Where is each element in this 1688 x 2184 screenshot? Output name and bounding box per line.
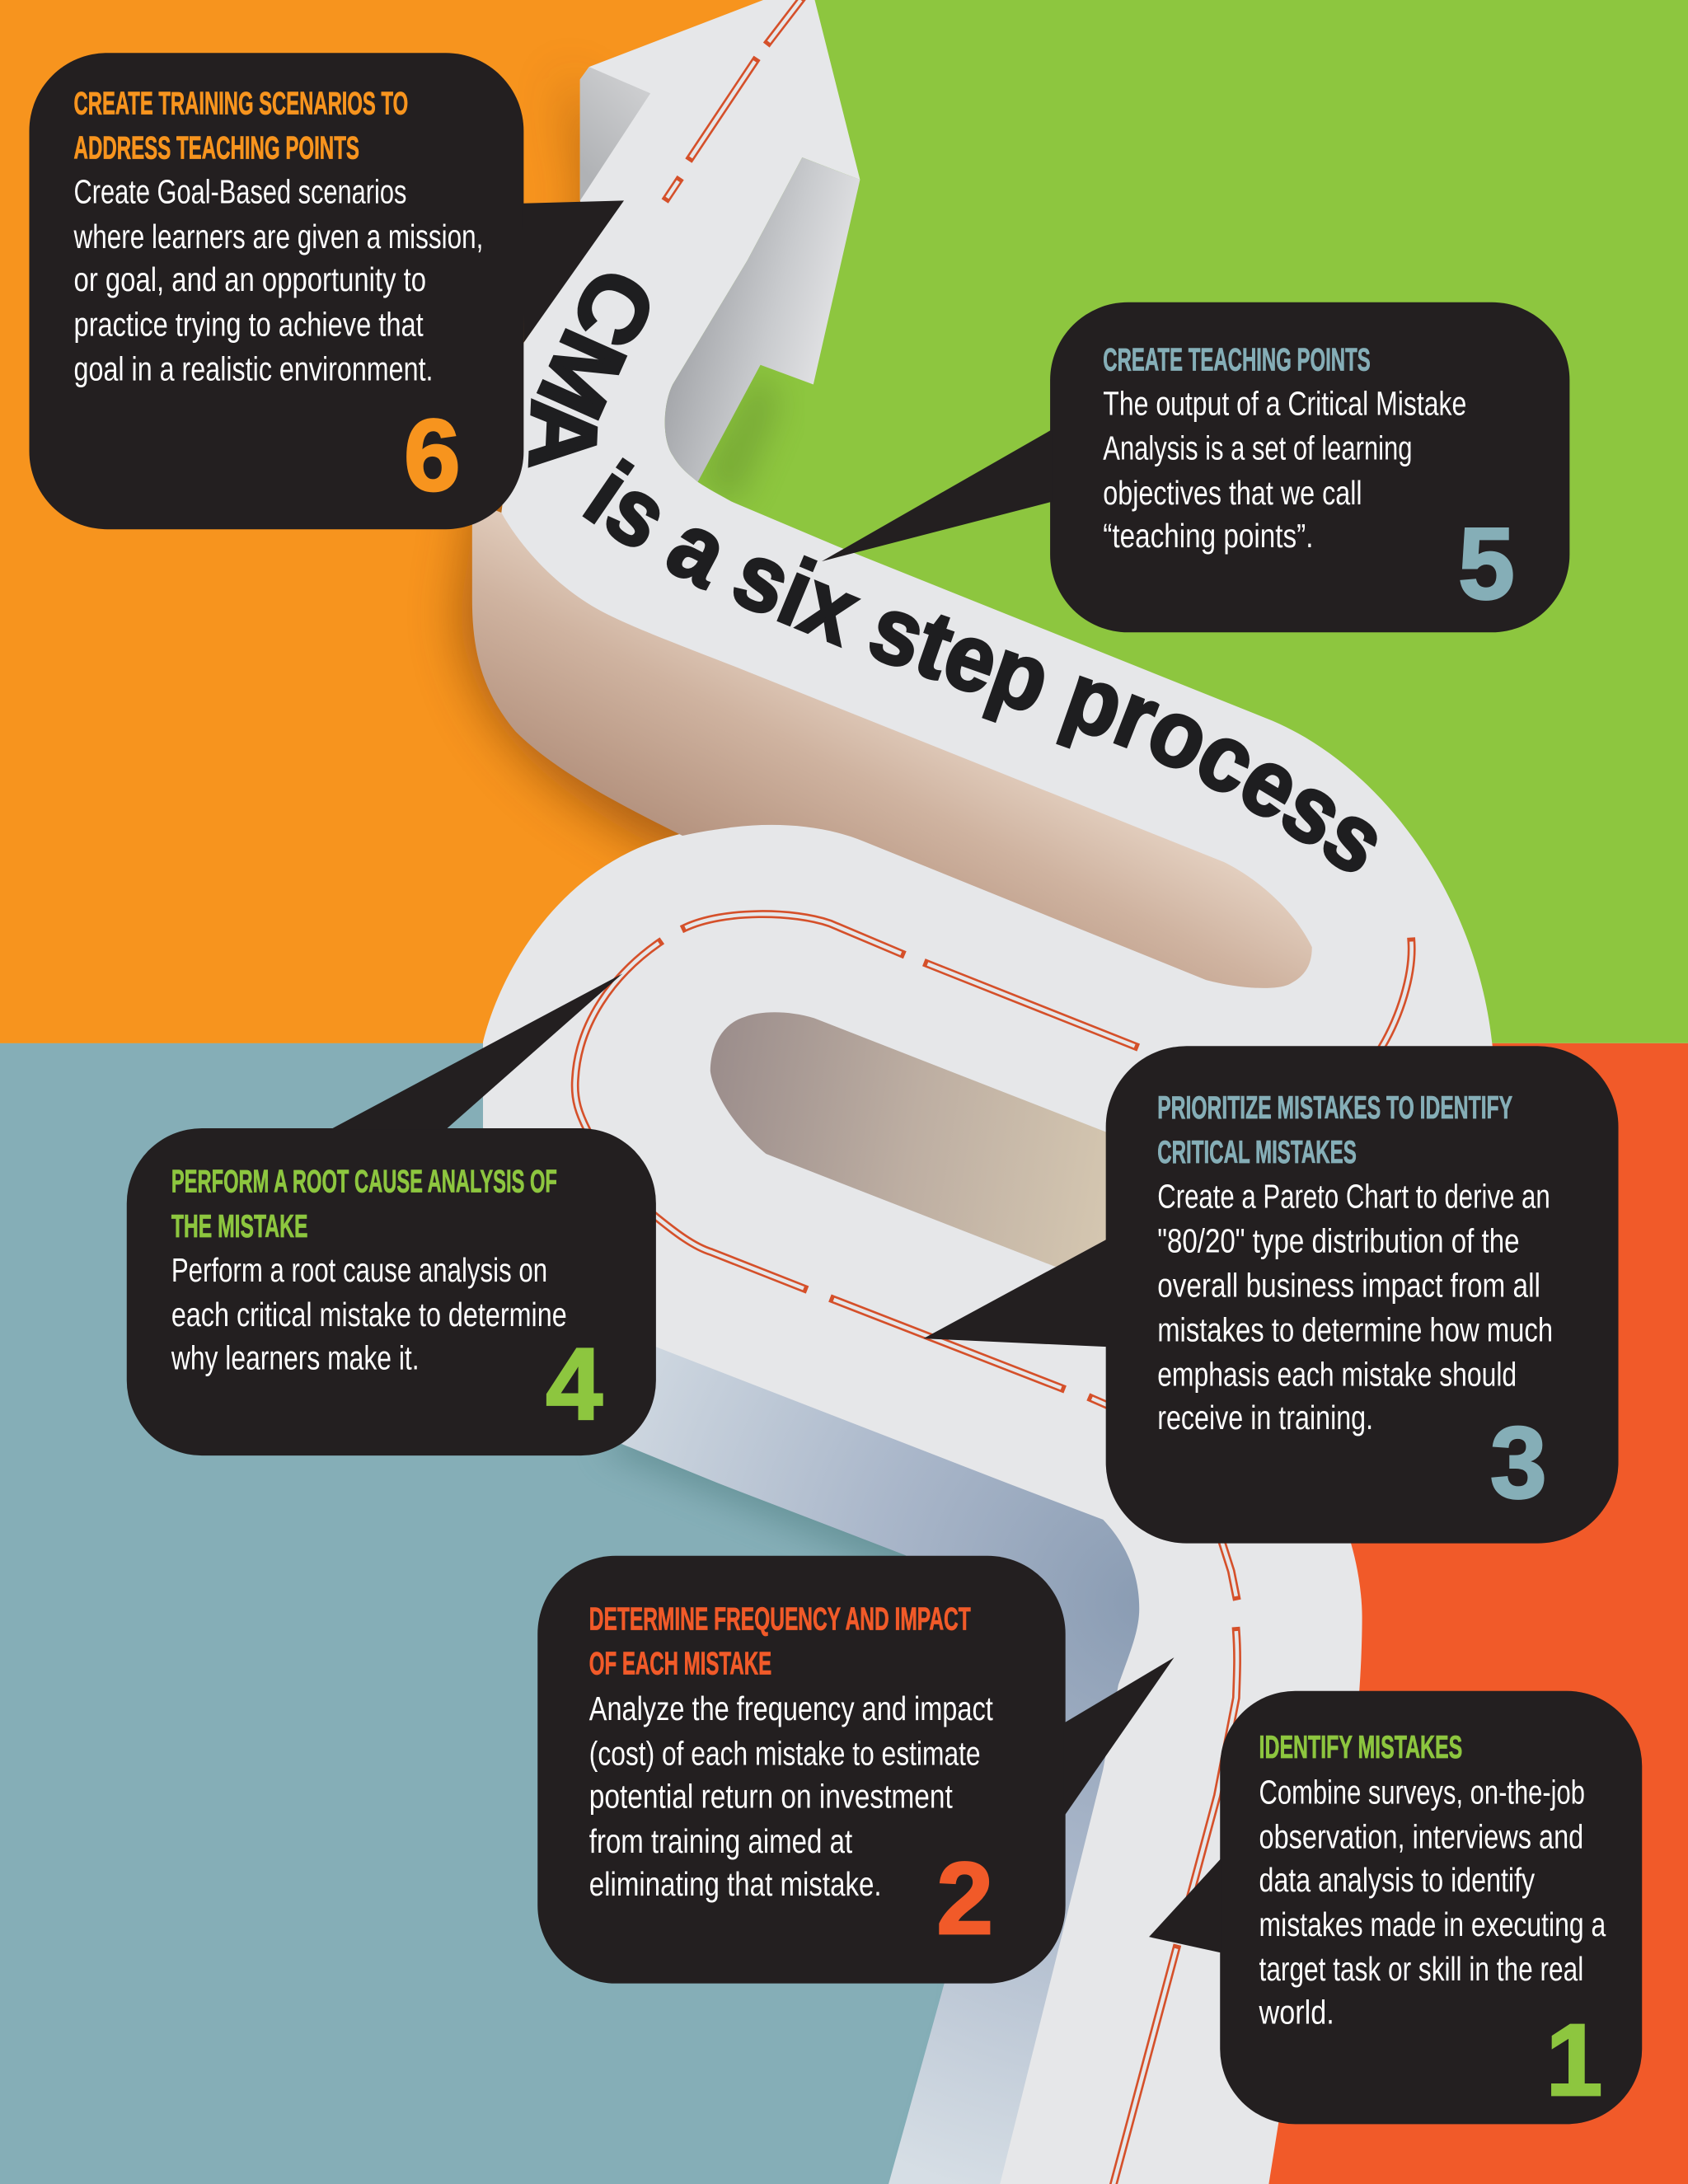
panel: step 4 xyxy=(127,973,656,1455)
heading 6 xyxy=(74,87,408,166)
body text 4 xyxy=(171,1251,567,1376)
shadow on green beside arrow xyxy=(698,365,780,504)
body text 5: The output of a Critical Mistake xyxy=(1103,385,1466,423)
heading 3: CRITICAL MISTAKES xyxy=(1157,1135,1357,1170)
arrow fold: left xyxy=(580,67,650,200)
body text 1 xyxy=(1259,1774,1606,2032)
body text 3 xyxy=(1157,1177,1553,1436)
number 1: 1 xyxy=(1546,2004,1602,2117)
background: orange quadrant xyxy=(0,0,780,1043)
body text 4: Perform a root cause analysis on xyxy=(171,1251,547,1289)
bubble shape 4 xyxy=(127,973,656,1455)
heading 2: OF EACH MISTAKE xyxy=(589,1646,771,1681)
body text 6 xyxy=(73,173,483,387)
panel: step 2 xyxy=(537,1556,1174,1984)
body text 2 xyxy=(589,1690,993,1903)
body text 2: (cost) of each mistake to estimate xyxy=(589,1734,981,1772)
shadow on teal below ribbon xyxy=(599,1379,1058,2184)
body text 1: mistakes made in executing a xyxy=(1259,1905,1606,1943)
body text 4: why learners make it. xyxy=(171,1338,420,1376)
body text 3: mistakes to determine how much xyxy=(1157,1311,1553,1349)
title on ribbon: is a six step process xyxy=(582,457,1377,872)
bubble shape 3 xyxy=(923,1046,1619,1544)
heading 4 xyxy=(171,1165,557,1244)
heading 2 xyxy=(589,1601,971,1681)
body text 2: potential return on investment xyxy=(589,1778,953,1816)
body text 3: "80/20" type distribution of the xyxy=(1157,1221,1520,1259)
body text 5: “teaching points”. xyxy=(1103,517,1313,555)
body text 6: or goal, and an opportunity to xyxy=(74,260,426,298)
heading 1: IDENTIFY MISTAKES xyxy=(1259,1730,1462,1765)
body text 2: from training aimed at xyxy=(589,1822,852,1860)
body text 1: observation, interviews and xyxy=(1259,1818,1583,1856)
heading 6: CREATE TRAINING SCENARIOS TO xyxy=(74,87,408,122)
number 4: 4 xyxy=(546,1328,603,1441)
number 3: 3 xyxy=(1490,1406,1547,1520)
body text 6: goal in a realistic environment. xyxy=(74,349,434,387)
body text 5: objectives that we call xyxy=(1103,474,1362,512)
heading 5: CREATE TEACHING POINTS xyxy=(1103,343,1371,378)
body text 4: each critical mistake to determine xyxy=(171,1296,567,1333)
heading 2: DETERMINE FREQUENCY AND IMPACT xyxy=(589,1601,971,1637)
heading 6: ADDRESS TEACHING POINTS xyxy=(74,131,359,166)
body text 1: world. xyxy=(1259,1994,1334,2032)
title on ribbon xyxy=(528,274,1377,872)
body text 6: Create Goal-Based scenarios xyxy=(74,173,406,211)
bubble shape 2 xyxy=(537,1556,1174,1984)
body text 3: emphasis each mistake should xyxy=(1157,1356,1517,1394)
body text 1: data analysis to identify xyxy=(1259,1861,1536,1899)
panel: step 3 xyxy=(923,1046,1619,1544)
ribbon underside: blue-grey shading xyxy=(599,1324,1156,2184)
bubble shape 6 xyxy=(29,53,624,529)
body text 1: Combine surveys, on-the-job xyxy=(1259,1774,1585,1811)
heading 3 xyxy=(1157,1090,1512,1170)
bubble shape 5 xyxy=(822,302,1569,632)
heading 4: PERFORM A ROOT CAUSE ANALYSIS OF xyxy=(171,1165,557,1200)
number 5: 5 xyxy=(1458,508,1515,621)
body text 5 xyxy=(1103,385,1466,555)
ribbon pocket: grey-tan inner curve xyxy=(710,1012,1114,1270)
body text 1: target task or skill in the real xyxy=(1259,1950,1583,1988)
panel: step 5 xyxy=(822,302,1569,632)
background: teal quadrant xyxy=(0,1043,1114,2184)
ribbon underside: tan finger xyxy=(472,501,1312,988)
panel: step 6 xyxy=(29,53,624,529)
body text 5: Analysis is a set of learning xyxy=(1103,429,1412,467)
bubble shape 1 xyxy=(1149,1691,1642,2124)
heading 4: THE MISTAKE xyxy=(171,1209,307,1244)
number 6: 6 xyxy=(404,399,461,513)
dashed red centre line xyxy=(575,0,1412,2184)
title on ribbon: CMA xyxy=(528,274,649,468)
arrow fold: right with inner curve xyxy=(665,157,860,482)
body text 6: practice trying to achieve that xyxy=(74,305,424,343)
body text 2: eliminating that mistake. xyxy=(589,1865,882,1903)
body text 3: Create a Pareto Chart to derive an xyxy=(1157,1177,1550,1215)
panel: step 1 xyxy=(1149,1691,1642,2124)
number 2: 2 xyxy=(936,1842,993,1956)
body text 3: overall business impact from all xyxy=(1157,1266,1540,1304)
ribbon top surface xyxy=(481,0,1493,2184)
body text 3: receive in training. xyxy=(1157,1399,1373,1436)
body text 6: where learners are given a mission, xyxy=(73,218,483,255)
shadow on orange behind ribbon xyxy=(434,84,679,858)
background: green quadrant xyxy=(0,0,1688,1043)
body text 2: Analyze the frequency and impact xyxy=(589,1690,993,1727)
background: red-orange quadrant xyxy=(1114,1043,1688,2184)
